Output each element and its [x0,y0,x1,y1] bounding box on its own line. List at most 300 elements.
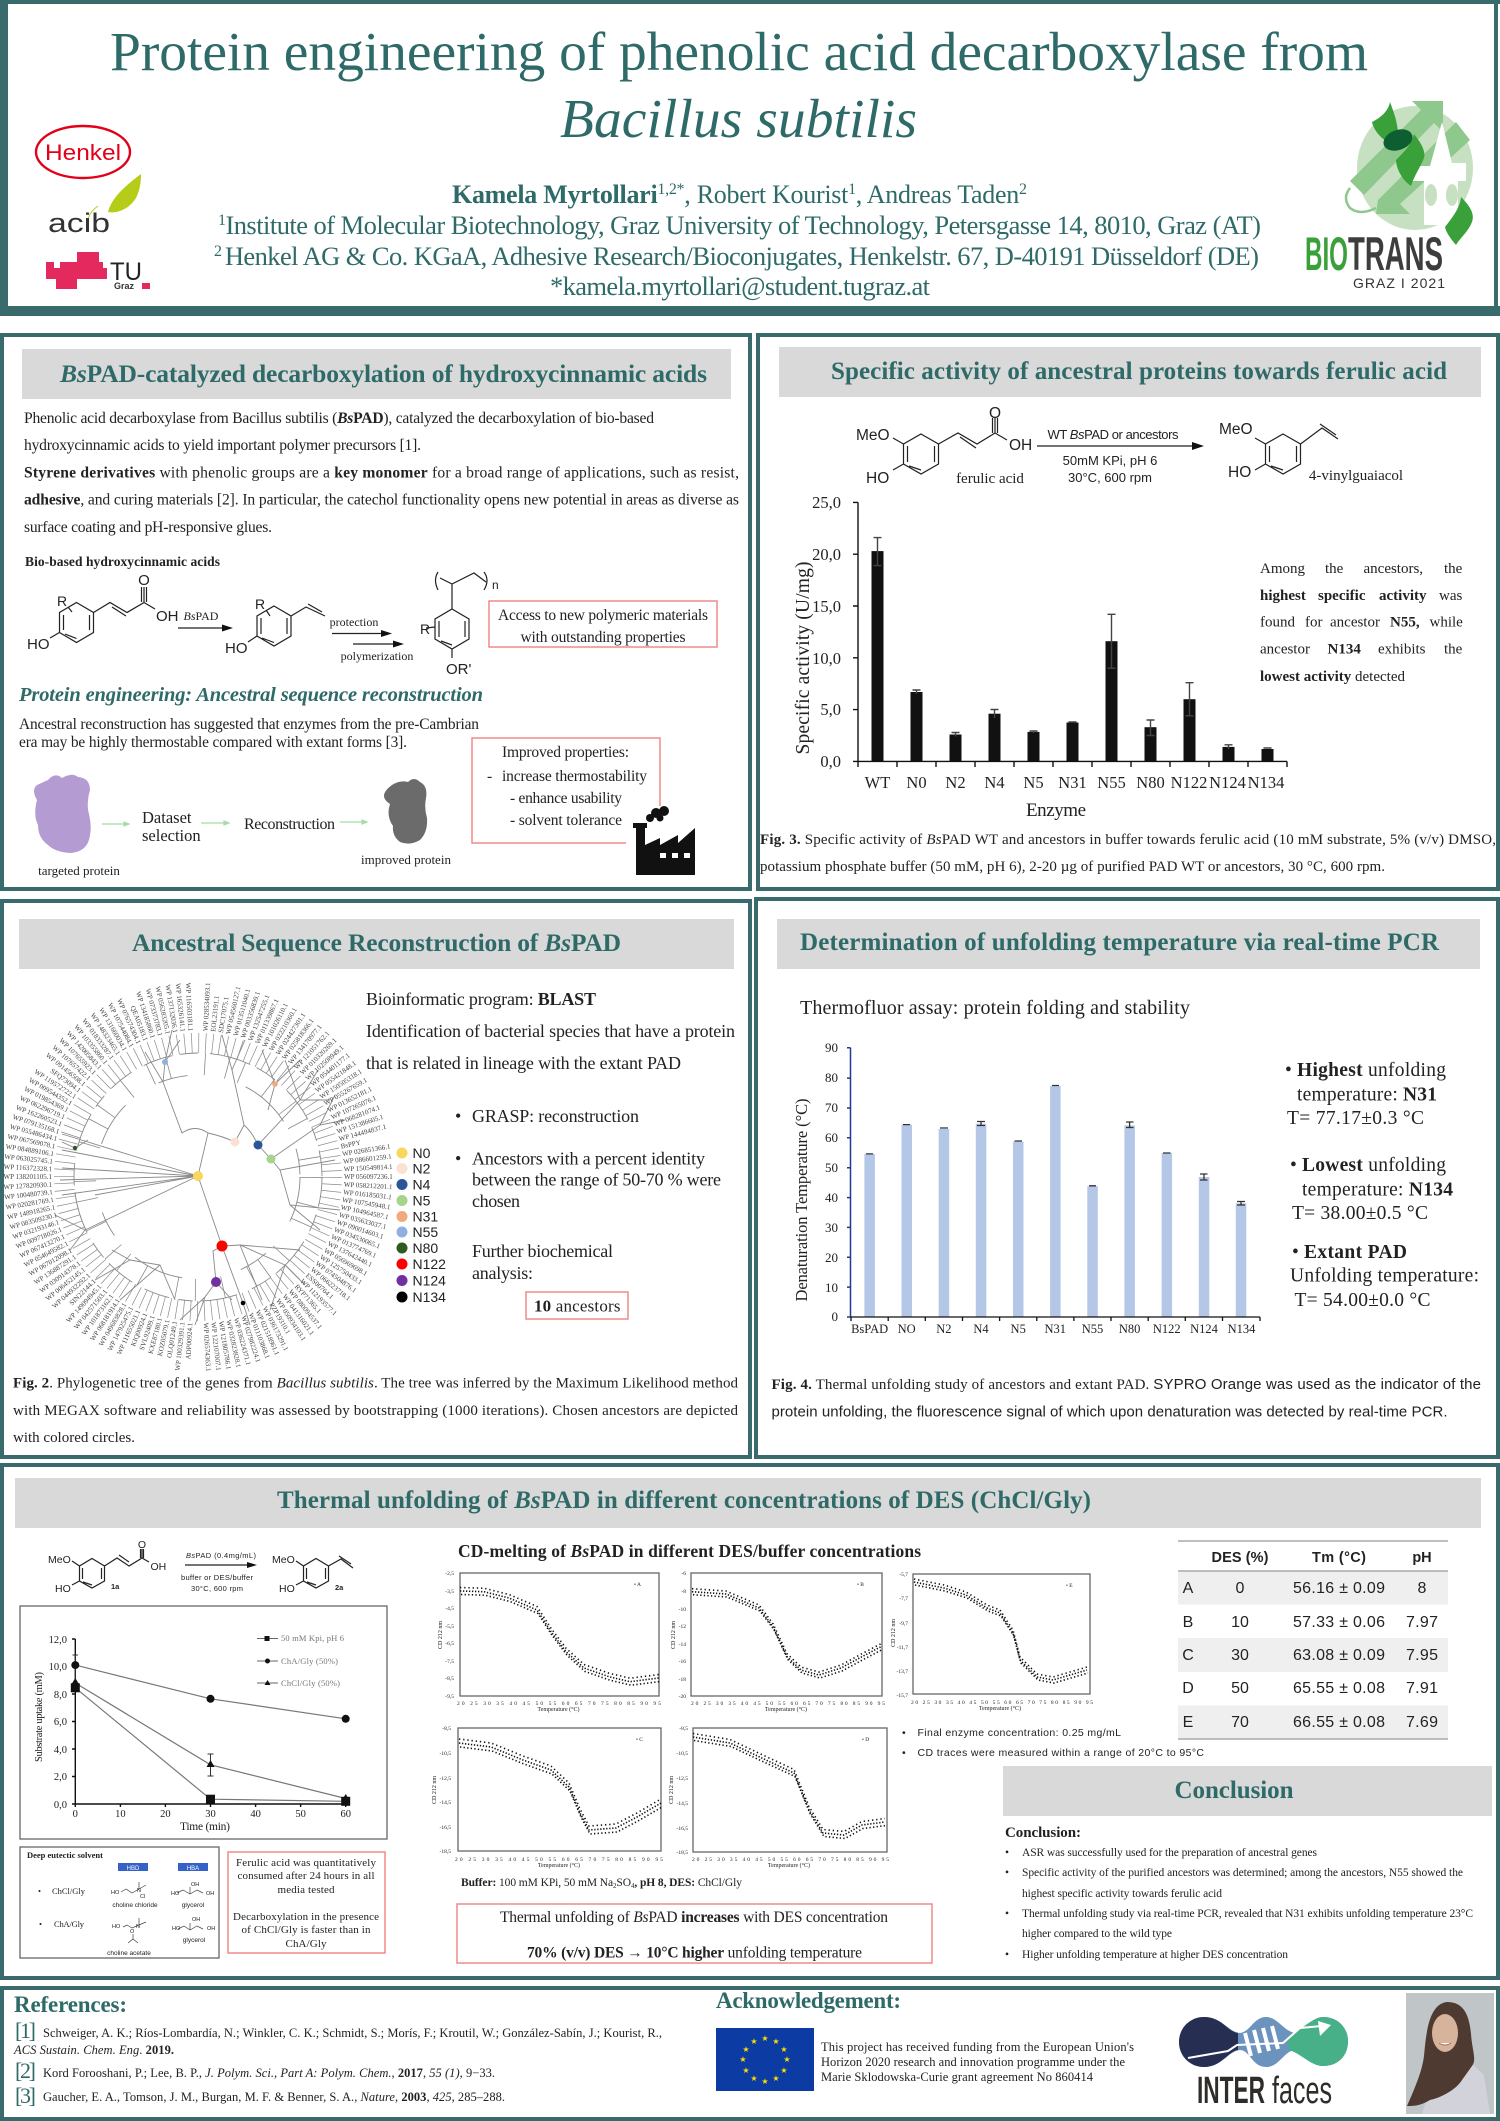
line chart: substrate uptake: 60 [340,1809,351,1820]
chart: phylogenetic tree: WP 036224371.1 [232,1317,252,1367]
text block: highest specific activity: activity [1379,588,1427,604]
text block: highest specific activity: was [1439,588,1462,604]
chart: phylogenetic tree: WP 026574363.1 [202,1323,212,1372]
chart: CD plot B: -12 [679,1624,686,1630]
bar chart: specific activity: 20,0 [812,545,841,564]
callout: 10 ancestors: 10 ancestors [534,1296,620,1316]
chart: phylogenetic tree: WP 021518961.1 [254,1309,281,1357]
text: thermofluor assay: Thermofluor assay: protein folding and stability [800,997,1190,1019]
chart: phylogenetic tree: WP 054560127.1 [224,985,243,1035]
bar chart: specific activity: Enzyme [1026,800,1086,821]
chart: phylogenetic tree: WP 138201105.1 [4,1173,52,1181]
table: DES concentrations: D [1182,1680,1194,1697]
table: DES concentrations: A [1183,1580,1194,1597]
chemical scheme: 1a to 2a: 1a [111,1582,120,1591]
chart: phylogenetic tree: WP 090014603.1 [336,1218,385,1241]
text block: highest specific activity [1260,561,1463,685]
chart: phylogenetic tree: WP 107544084.1 [106,1002,136,1049]
chart: CD plot E: -9,7 [899,1621,908,1627]
icon: improved protein: improved protein [361,852,451,867]
line chart: substrate uptake: ChA/Gly (50%) [281,1656,338,1666]
chart: phylogenetic tree: WP 020281769.1 [5,1196,55,1211]
chart: phylogenetic tree: WP 116372328.1 [4,1163,53,1173]
callout: improved properties: increase thermostability [502,768,647,785]
arrow [201,821,229,825]
chart: phylogenetic tree: KXE87180.1 [147,1317,164,1355]
text block: conclusion list: Conclusion: [1005,1825,1081,1841]
chart: phylogenetic tree: WP 104964587.1 [340,1203,390,1222]
chemical scheme: hydroxycinnamic acid to polymer: HO [225,640,248,657]
chemical scheme: hydroxycinnamic acid to polymer: protection [330,615,378,629]
callout: new polymeric materials: with outstanding properties [520,629,686,646]
line chart: substrate uptake: 20 [160,1809,171,1820]
text block: unfolding temperatures: temperature: N31 [1297,1084,1437,1106]
text block: introduction: surface coating and pH-responsive glues. [24,519,272,536]
text block: introduction: Phenolic acid decarboxylase from Bacillus subtilis (BsPAD), catalyzed the decarboxylation of bio-based [24,410,654,427]
panel: deep eutectic solvent: choline chloride [112,1902,158,1909]
chart: phylogenetic tree: BsPPY [340,1139,361,1151]
text block: highest specific activity: ancestors, [1364,561,1423,577]
chart: phylogenetic tree: WP 003356839.1 [239,990,262,1039]
chart: phylogenetic tree: RYP71365.1 [293,1283,323,1315]
chart: phylogenetic tree: WP 056969698.1 [322,1247,369,1278]
chart: phylogenetic tree: WP 151386605.1 [336,1113,385,1136]
bar chart: denaturation temperature: 30 [825,1220,838,1235]
chart: phylogenetic tree: QEA05183.1 [129,1005,150,1043]
chart: phylogenetic tree: ESS00764.1 [304,1272,335,1301]
line chart: substrate uptake [20,1606,387,1839]
chemical scheme: ferulic acid to 4-vinylguaiacol: MeO [1219,421,1253,438]
chart: phylogenetic tree: WP 122107007.1 [209,1322,222,1372]
caption: figure 2: with MEGAX software and reliability was assessed by bootstrapping (1000 iterations). Chosen ancestors are depicted [13,1403,738,1419]
chart: phylogenetic tree: WP 041316021.1 [281,1293,316,1337]
chart: phylogenetic tree: WP 107655923.1 [57,1036,98,1077]
text block: introduction: adhesive, and curing materials [2]. In particular, the catechol functionality opens new potential in areas as diverse as [24,492,739,508]
line chart: substrate uptake: ChCl/Gly (50%) [281,1678,340,1688]
chart: phylogenetic tree: WP 032193146.1 [12,1218,61,1241]
text block: conclusion list [1005,1825,1473,1961]
chart: phylogenetic tree: SVL92409.1 [138,1314,157,1351]
table: DES concentrations: 56.16 ± 0.09 [1293,1580,1385,1597]
chart: phylogenetic tree: WP 083509230.1 [9,1211,58,1231]
icon: Biotrans logo: GRAZ I 2021 [1353,275,1445,291]
bar chart: specific activity: N0 [906,773,927,792]
chart: phylogenetic tree: WP 013774769.1 [330,1233,378,1260]
chart: CD plot B: CD 212 nm [671,1621,677,1649]
bar chart: specific activity: Specific activity (U/mg) [793,562,814,754]
legend: ancestors: N124 [412,1272,446,1288]
heading: references: References: [14,1992,127,2017]
chart: CD plot E: -15,7 [897,1693,908,1699]
text block: introduction: hydroxycinnamic acids to yield important polymer precursors [1]. [24,437,421,454]
text block: highest specific activity: N55, [1390,614,1420,630]
text block: conclusion list: highest specific activity towards ferulic acid [1022,1888,1222,1900]
chart: phylogenetic tree: WP 055486434.1 [9,1123,58,1143]
chemical scheme: 1a to 2a: BsPAD (0.4mg/mL) [186,1551,256,1560]
bar chart: specific activity: N5 [1023,773,1044,792]
chemical scheme: hydroxycinnamic acid to polymer: HO [27,636,50,653]
heading: Determination of unfolding temperature via real-time PCR [800,929,1440,956]
table: DES concentrations: C [1182,1647,1194,1664]
caption: figure 3: Fig. 3. Specific activity of BsPAD WT and ancestors in buffer towards ferulic acid (10 mM substrate, 5% (v/v) DMSO, [760,832,1496,848]
callout: thermal unfolding increases: Thermal unfolding of BsPAD increases with DES concentration [500,1909,888,1926]
text block: highest specific activity: specific [1318,588,1366,604]
legend: ancestors: N134 [412,1289,446,1305]
bar chart: specific activity: 0,0 [820,752,841,771]
chemical scheme: ferulic acid to 4-vinylguaiacol: WT BsPAD or ancestors [1048,427,1179,442]
chart: CD plot A: • A [634,1582,641,1588]
callout: ferulic acid consumption: Decarboxylation in the presence [233,1911,379,1923]
chart: CD plot E: • E [1066,1583,1073,1589]
chart: phylogenetic tree: WP 044932292.1 [51,1271,93,1310]
text: buffer composition: 2 [613,1882,617,1890]
chart: CD plot C: CD 212 nm [432,1776,438,1804]
chemical scheme: 1a to 2a: MeO [48,1554,71,1566]
line chart: substrate uptake: 4,0 [54,1745,67,1756]
line chart: substrate uptake: 30 [205,1809,216,1820]
chart: phylogenetic tree: WP 148323465.1 [89,1011,122,1057]
callout: 10 ancestors [526,1292,628,1319]
chart: phylogenetic tree: WP 102508949.1 [304,1043,346,1082]
chart: phylogenetic tree: WP 026851366.1 [342,1143,391,1158]
list: reconstruction bullets: Ancestors with a percent identity [472,1148,705,1168]
affiliations [214,210,1261,301]
callout: ferulic acid consumption [228,1852,385,1953]
chart: CD plot B: -14 [679,1642,686,1648]
chart: phylogenetic tree: WP 107657422.1 [51,1044,93,1083]
chart: phylogenetic tree: WP 009718026.1 [15,1225,64,1251]
chart: CD plot D: • D [862,1737,869,1743]
text block: unfolding temperatures: temperature: N134 [1302,1180,1453,1200]
text block: reference list: [3] [15,2083,36,2108]
bar chart: specific activity: 25,0 [812,493,841,512]
panel: deep eutectic solvent: HO [171,1891,180,1897]
panel: deep eutectic solvent: HO [112,1924,121,1930]
chart: phylogenetic tree: WP 111655021.1 [115,1308,142,1356]
icon: EU flag: ★ [750,2074,758,2083]
heading [777,919,1480,969]
callout: improved properties: Improved properties: [502,744,629,761]
chemical scheme: ferulic acid to 4-vinylguaiacol: 4-vinylguaiacol [1309,468,1403,484]
text block: ancestral reconstruction: era may be highly thermostable compared with extant forms [3]. [19,734,407,751]
chart: CD plot A: -6,5 [445,1641,454,1647]
chart: phylogenetic tree: WP 058212201.1 [344,1181,393,1191]
chemical scheme: 1a to 2a: O [138,1539,146,1551]
chart: phylogenetic tree: WP 055421848.1 [314,1059,358,1094]
affiliations: Institute of Molecular Biotechnology, Graz University of Technology, Petersgasse 14, 8010, Graz (AT) [225,210,1261,240]
chart: CD plot B: -16 [679,1659,686,1665]
chemical scheme: ferulic acid to 4-vinylguaiacol [856,405,1403,487]
panel: deep eutectic solvent: O [130,1929,135,1935]
text: dataset selection: selection [142,826,201,845]
chart: CD plot E [891,1572,1093,1712]
table: DES concentrations: 63.08 ± 0.09 [1293,1647,1385,1664]
heading [22,349,731,399]
chart: phylogenetic tree: WP 068181914.1 [89,1297,122,1343]
chart: phylogenetic tree: WP 010320269.1 [298,1036,339,1077]
chart: phylogenetic tree: WP 062296719.1 [18,1094,67,1121]
icon: INTERfaces logo: INTER [1197,2070,1265,2112]
bar chart: denaturation temperature: 90 [825,1040,838,1055]
chart: phylogenetic tree: WP 112193577.1 [298,1277,339,1318]
line chart: substrate uptake: 50 [295,1809,306,1820]
text block: reference list: Gaucher, E. A., Tomson, J. M., Burgan, M. F. & Benner, S. A., Nature, 2003, 425, 285–288. [43,2090,505,2104]
heading: conclusion: Conclusion [1174,1777,1294,1804]
callout: improved properties [472,738,660,843]
chart: phylogenetic tree: WP 084889106.1 [5,1143,55,1158]
panel: deep eutectic solvent: OH [206,1891,214,1897]
chart: phylogenetic tree: WP 076574304.1 [115,997,142,1046]
chemical scheme: 1a to 2a: HO [279,1583,295,1595]
chart: CD plot D: -16,5 [677,1826,688,1832]
table: DES concentrations: 70 [1231,1714,1249,1731]
text block: reference list: ACS Sustain. Chem. Eng. 2019. [13,2043,174,2057]
line chart: substrate uptake: 0,0 [54,1800,67,1811]
icon: Henkel logo [36,126,130,178]
heading [779,347,1481,397]
text: reconstruction: Reconstruction [244,816,335,833]
callout: improved properties: - solvent tolerance [510,812,622,829]
callout: ferulic acid consumption: ChA/Gly [286,1938,327,1950]
bar chart: denaturation temperature: 40 [825,1190,838,1205]
legend: ancestors: N2 [412,1160,431,1176]
chart: CD plot E: 20 25 30 35 40 45 50 55 60 65 70 75 80 85 90 95 [911,1700,1093,1706]
table: DES concentrations: 7.91 [1406,1680,1438,1697]
chart: phylogenetic tree: WP 079135168.1 [12,1113,61,1136]
callout: ferulic acid consumption: media tested [278,1884,335,1896]
text: buffer composition: ChCl/Gly [698,1877,742,1889]
line chart: substrate uptake: 6,0 [54,1717,67,1728]
chart: phylogenetic tree: WP 006452145.1 [44,1265,87,1303]
chart: phylogenetic tree: WP 121051762.1 [293,1029,332,1071]
chart: phylogenetic tree: WP 034530065.1 [333,1226,382,1251]
chart: phylogenetic tree: WP 107265076.1 [330,1094,378,1121]
chart: phylogenetic tree: WP 066223718.1 [309,1266,352,1303]
panel: deep eutectic solvent: ChCl/Gly [52,1886,86,1896]
chart: phylogenetic tree: WP 137642440.1 [326,1240,374,1269]
title: Bacillus subtilis [560,89,917,150]
chart: phylogenetic tree: WP 137132036.1 [164,984,179,1034]
text block: conclusion list: • [1005,1949,1009,1961]
text block: conclusion list: Thermal unfolding study via real-time PCR, revealed that N31 exhibits unfolding temperature 23°C [1022,1908,1473,1920]
caption: figure 2: with colored circles. [13,1430,135,1446]
caption: figure 3 [760,832,1496,875]
chart: CD plot B: -6 [681,1571,686,1577]
icon: targeted protein [34,775,120,878]
chart: phylogenetic tree: WP 101873162.1 [80,1292,116,1337]
text: dataset selection: Dataset [142,808,192,827]
table: DES concentrations: 0 [1236,1580,1245,1597]
text block: funding statement: This project has received funding from the European Union's [821,2040,1134,2054]
table: DES concentrations [1178,1541,1448,1739]
chart: CD plot D: -12,5 [677,1776,688,1782]
chart: phylogenetic tree: WP 165326141.1 [174,983,187,1033]
chart: phylogenetic tree: WP 116503181.1 [184,983,194,1032]
chart: CD plot C: Temperature (°C) [538,1862,580,1869]
bar chart: denaturation temperature: N31 [1045,1322,1066,1336]
text block: highest specific activity: while [1430,614,1463,630]
bar chart: specific activity: WT [865,773,890,792]
text block: reference list [13,2018,662,2108]
chart: CD plot E: -13,7 [897,1669,908,1675]
list: reconstruction bullets: Further biochemical [472,1241,613,1261]
callout: improved properties: - [487,768,492,785]
bar chart: specific activity: N122 [1171,773,1207,792]
authors: 2 [1019,181,1027,198]
icon: EU flag: ★ [772,2074,780,2083]
chart: CD plot E: Temperature (°C) [979,1705,1021,1712]
chart: CD plot A: -5,5 [445,1624,454,1630]
chart: phylogenetic tree: WP 119572722.1 [33,1068,78,1101]
chart: phylogenetic tree: WP 136887291.1 [32,1253,78,1286]
icon: TU Graz logo [46,252,150,291]
chart: CD plot B [671,1571,885,1713]
chart: phylogenetic tree: WP 127820930.1 [3,1181,53,1191]
text block: highest specific activity: the [1444,642,1463,658]
text block: bioinformatic program: Bioinformatic program: BLAST [366,989,596,1009]
chart: phylogenetic tree: WP 036173291.1 [261,1305,290,1353]
text block: highest specific activity: ancestor [1260,642,1310,658]
chart: phylogenetic tree: WP 049683828.1 [97,1301,129,1348]
chart: phylogenetic tree: WP 025818366.1 [281,1017,316,1061]
text block: conclusion list: • [1005,1908,1009,1920]
line chart: substrate uptake: 40 [250,1809,261,1820]
panel: deep eutectic solvent: HBD [127,1866,140,1872]
text block: highest specific activity: the [1444,561,1463,577]
chart: CD plot A: -7,5 [445,1659,454,1665]
chart: phylogenetic tree: WP 013652181.1 [326,1085,374,1114]
bar chart: denaturation temperature: 10 [825,1280,838,1295]
legend: ancestors: N5 [412,1192,431,1208]
text block: conclusion list: • [1005,1867,1009,1879]
panel: thermal unfolding in DES [2,1465,1498,1978]
text block: conclusion list: higher compared to the wild type [1022,1928,1172,1940]
chart: CD plot C: 20 25 30 35 40 45 50 55 60 65 70 75 80 85 90 95 [455,1857,663,1863]
text block: highest specific activity: ancestor [1330,614,1380,630]
chart: phylogenetic tree: KOZ05079.1 [156,1318,172,1357]
chemical scheme: hydroxycinnamic acid to polymer [27,572,499,678]
chart: phylogenetic tree: WP 050934103.1 [274,1297,308,1343]
chart: phylogenetic tree: WP 019854369.1 [23,1085,70,1115]
chart: CD plot A: -2,5 [445,1571,454,1577]
text block: reference list: [2] [15,2058,36,2083]
bar chart: denaturation temperature: N124 [1190,1322,1219,1336]
icon: INTERfaces logo: faces [1272,2070,1332,2112]
table: DES concentrations: 50 [1231,1680,1249,1697]
chart: phylogenetic tree: WP 142005843.1 [65,1030,104,1072]
authors: 1 [848,181,856,198]
text block: unfolding temperatures: Extant PAD [1304,1242,1407,1263]
icon: EU flag: ★ [783,2055,791,2064]
authors: Kamela Myrtollari [452,180,658,209]
chart: phylogenetic tree: WP 055267659.1 [322,1076,369,1107]
bar chart: specific activity [793,493,1287,821]
callout: new polymeric materials: Access to new polymeric materials [498,607,708,624]
text: buffer composition: , pH 8, DES: [634,1877,695,1889]
authors: 1,2* [657,181,685,198]
chart: phylogenetic tree: WP 101026110.1 [261,1001,290,1049]
chart: CD plot D: -18,5 [677,1850,688,1856]
text block: bioinformatic program: that is related in lineage with the extant PAD [366,1053,681,1073]
panel: deep eutectic solvent [20,1847,219,1958]
bar chart: denaturation temperature: N2 [936,1322,952,1336]
chemical scheme: ferulic acid to 4-vinylguaiacol: ferulic acid [956,471,1024,487]
chart: phylogenetic tree: WP 149094945.1 [65,1282,104,1324]
heading [15,1478,1481,1528]
panel: deep eutectic solvent: Cl [140,1894,145,1900]
chart: CD plot E: -7,7 [899,1596,908,1602]
bar chart: denaturation temperature: N4 [973,1322,989,1336]
icon: TU Graz logo: TU [110,258,142,286]
chart: phylogenetic tree: WP 067413270.1 [18,1233,67,1260]
icon: acib logo [48,174,141,238]
authors: , Robert Kourist [684,180,849,209]
text block: introduction [24,410,739,536]
chart: phylogenetic tree: WP 073373783.1 [144,988,164,1037]
bar chart: denaturation temperature: 20 [825,1250,838,1265]
icon: Biotrans logo: BIO [1305,227,1348,280]
text: buffer composition: SO [616,1877,631,1889]
callout: new polymeric materials [489,601,717,647]
heading: Ancestral Sequence Reconstruction of BsPAD [132,928,621,957]
bar chart: denaturation temperature: 70 [825,1100,838,1115]
affiliations: 2 [214,243,225,260]
chart: CD plot D: -14,5 [677,1801,688,1807]
text: bio-based hydroxycinnamic acids label: Bio-based hydroxycinnamic acids [25,554,220,569]
text block: unfolding temperatures: T= 54.00±0.0 °C [1294,1290,1430,1311]
text block: reference list: [1] [15,2018,36,2043]
bar chart: denaturation temperature: NO [898,1322,916,1336]
chemical scheme: ferulic acid to 4-vinylguaiacol: O [989,405,1001,422]
heading: BsPAD-catalyzed decarboxylation of hydroxycinnamic acids [59,359,707,388]
chart: phylogenetic tree: WP 134170977.1 [287,1023,324,1066]
chart: phylogenetic tree: WP 013511040.1 [232,988,252,1037]
chart: phylogenetic tree: WP 100329391.1 [174,1321,187,1371]
chart: phylogenetic tree: WP 063025745.1 [4,1153,54,1166]
legend: ancestors: N55 [412,1224,438,1240]
chart: CD plot B: 20 25 30 35 40 45 50 55 60 65 70 75 80 85 90 95 [691,1701,885,1707]
chart: CD plot D: CD 212 nm [669,1776,675,1804]
caption: figure 4: protein unfolding, the fluorescence signal of which upon denaturation was detected by real-time PCR. [772,1404,1448,1420]
table: DES concentrations: B [1183,1614,1193,1631]
panel: deep eutectic solvent: HO [172,1926,181,1932]
line chart: substrate uptake: 12,0 [49,1635,67,1646]
bar chart: specific activity: 15,0 [812,597,841,616]
table: DES concentrations: 65.55 ± 0.08 [1293,1680,1385,1697]
bar chart: denaturation temperature: Denaturation Temperature (°C) [792,1098,811,1302]
panel: poster header [0,0,1500,316]
table: DES concentrations: DES (%) [1212,1550,1269,1566]
chemical scheme: ferulic acid to 4-vinylguaiacol: 50mM KPi, pH 6 [1063,453,1157,468]
list: reconstruction bullets: • [455,1148,461,1168]
text block: ancestral reconstruction: Ancestral reconstruction has suggested that enzymes from the pre-Cambrian [19,716,479,733]
chemical scheme: hydroxycinnamic acid to polymer: O [138,572,150,589]
chart: phylogenetic tree: WP 134185860.1 [134,991,157,1040]
chemical scheme: hydroxycinnamic acid to polymer: R [255,596,265,612]
callout: ferulic acid consumption: consumed after 24 hours in all [238,1870,374,1882]
icon: EU flag: ★ [742,2066,750,2075]
bar chart: specific activity: 5,0 [820,700,841,719]
chart: phylogenetic tree: WP 030914378.1 [38,1259,83,1295]
text block: conclusion list: ASR was successfully used for the preparation of ancestral genes [1022,1847,1318,1859]
panel: determination of unfolding temperature [756,899,1498,1457]
chart: CD plot E: -11,7 [897,1645,908,1651]
chemical scheme: 1a to 2a: OH [150,1561,166,1573]
text block: bioinformatic program [366,989,735,1073]
callout: improved properties: - enhance usability [510,790,622,807]
panel: deep eutectic solvent: HO [111,1890,120,1896]
chart: phylogenetic tree: WP 054401177.1 [309,1051,352,1088]
